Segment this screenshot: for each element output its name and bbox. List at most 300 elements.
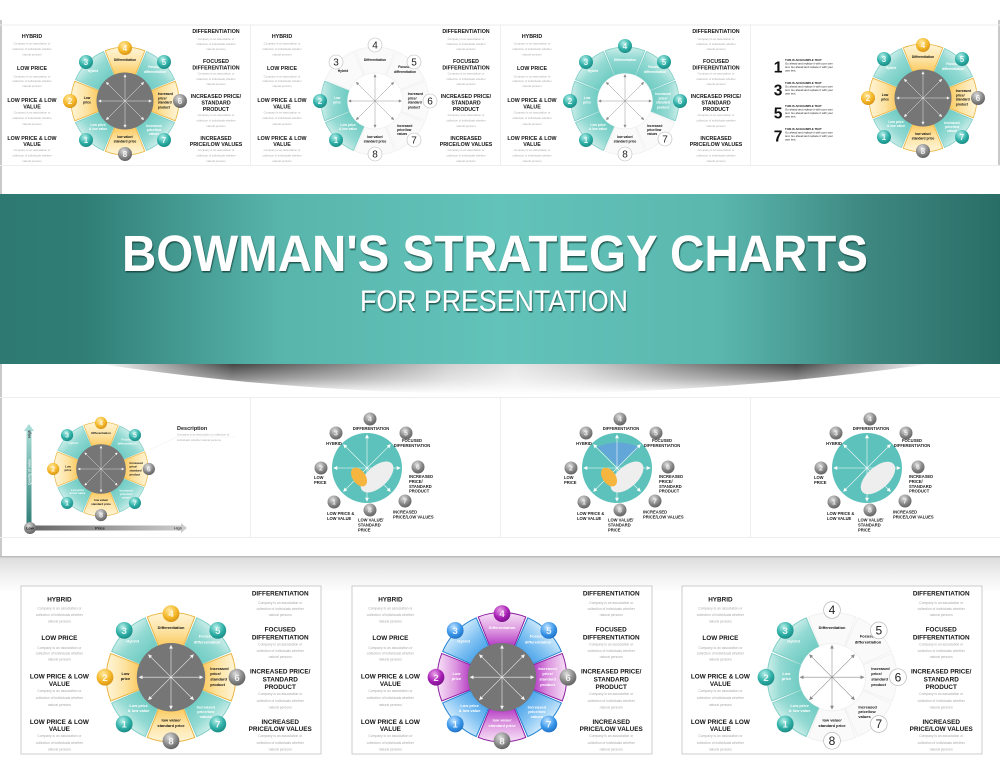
numbered list: own text.: [785, 138, 796, 142]
text column: right strategies: Company is an association or: [258, 642, 303, 646]
wheel chart: [47, 417, 155, 521]
text column: left strategies: natural persons: [272, 84, 292, 88]
text column: right strategies: DIFFERENTIATION: [442, 29, 490, 35]
segment labels: Low: [882, 93, 889, 97]
text column: right strategies: natural persons: [930, 613, 953, 617]
text column: right strategies: INCREASED: [200, 136, 232, 142]
segment labels: product: [408, 105, 421, 109]
segment labels: Low price: [790, 703, 810, 708]
segment labels: price: [83, 100, 91, 104]
strategy labels: STANDARD: [659, 484, 682, 489]
segment labels: Hybrid: [69, 441, 78, 445]
text column: left strategies: Company is an association or: [37, 734, 82, 738]
text column: left strategies: VALUE: [23, 142, 41, 148]
number balls: 2: [318, 97, 323, 106]
segment labels: Low: [782, 671, 791, 676]
text column: left strategies: natural persons: [379, 747, 402, 751]
segment labels: Low: [334, 96, 341, 100]
segment labels: & low value: [589, 127, 607, 131]
strategy labels: STANDARD: [909, 484, 932, 489]
text column: right strategies: natural persons: [600, 613, 623, 617]
number balls: 5: [133, 433, 137, 440]
number balls: 8: [829, 734, 836, 748]
text column: left strategies: collection of individuals whether: [512, 154, 552, 158]
panel: bottom slide 3 three teal segments: [682, 586, 982, 754]
numbered list: Go ahead and replace it with your own: [785, 62, 833, 66]
text column: right strategies: collection of individuals whether: [257, 741, 305, 745]
text column: right strategies: [190, 29, 243, 163]
text column: right strategies: DIFFERENTIATION: [192, 66, 240, 72]
segment labels: [782, 625, 890, 728]
teal circle chart: [832, 433, 902, 503]
number balls: 8: [168, 736, 174, 747]
numbered list: THIS IS AN EXAMPLE TEXT: [785, 104, 822, 108]
strategy labels: LOW VALUE/: [608, 518, 634, 522]
segment labels: differentiation: [942, 67, 964, 71]
text column: right strategies: Company is an association or: [919, 734, 964, 738]
strategy labels: FOCUSED: [902, 438, 922, 443]
number balls: 3: [834, 430, 838, 438]
text column: right strategies: INCREASED PRICE/: [250, 669, 311, 676]
description callout: individuals whether natural persons: [177, 438, 221, 442]
number balls: 5: [654, 430, 658, 438]
segment labels: values: [531, 714, 544, 719]
text column: right strategies: [580, 591, 643, 751]
text column: left strategies: Company is an association or: [368, 646, 413, 650]
segment labels: Hybrid: [338, 69, 348, 73]
strategy labels: PRICE/: [909, 479, 924, 484]
segment labels: price/: [129, 465, 137, 469]
segment labels: product: [956, 102, 969, 106]
segment labels: Low price: [460, 703, 480, 708]
segment labels: low value/: [493, 718, 512, 723]
segment labels: Focused: [398, 65, 412, 69]
segment labels: Increased: [647, 124, 662, 128]
wheel chart: [97, 605, 245, 749]
segment labels: standard: [539, 676, 557, 681]
text column: right strategies: collection of individuals whether: [918, 607, 966, 611]
segment labels: price/: [158, 96, 167, 100]
numbered list: text. Go ahead and replace it with your: [785, 88, 833, 92]
arrows: [348, 74, 402, 128]
number balls: 6: [427, 96, 433, 108]
number balls: 1: [783, 720, 789, 731]
segment labels: Hybrid: [126, 638, 139, 643]
segment labels: Low: [84, 96, 91, 100]
number balls: 4: [499, 609, 505, 620]
number balls: 1: [332, 500, 336, 506]
text column: left strategies: HYBRID: [47, 597, 72, 604]
text column: left strategies: LOW PRICE & LOW: [691, 719, 750, 726]
segment labels: & low value: [789, 708, 811, 713]
axis: quality of value: Quality of value: [28, 459, 32, 485]
segment labels: values: [397, 132, 407, 136]
text column: left strategies: collection of individuals whether: [12, 116, 52, 120]
text column: left strategies: Company is an association or: [698, 606, 743, 610]
text column: right strategies: collection of individuals whether: [446, 154, 486, 158]
text column: right strategies: natural persons: [930, 747, 953, 751]
segment labels: [83, 58, 173, 144]
text column: right strategies: INCREASED PRICE/: [191, 94, 242, 100]
text column: right strategies: STANDARD: [594, 676, 629, 683]
segment labels: values: [200, 714, 213, 719]
text column: left strategies: natural persons: [48, 620, 71, 624]
segment labels: price/low: [120, 492, 133, 496]
text column: left strategies: collection of individuals whether: [36, 696, 84, 700]
text column: right strategies: collection of individuals whether: [588, 607, 636, 611]
arrows: [598, 74, 652, 128]
text column: right strategies: DIFFERENTIATION: [583, 634, 640, 641]
text column: right strategies: natural persons: [930, 705, 953, 709]
text column: left strategies: Company is an association or: [368, 606, 413, 610]
text column: right strategies: natural persons: [600, 655, 623, 659]
number balls: 4: [618, 416, 622, 424]
segment labels: Increased: [197, 704, 216, 709]
text column: right strategies: natural persons: [206, 47, 226, 51]
numbered list: own text.: [785, 114, 796, 118]
wheel chart: [63, 41, 187, 161]
text column: left strategies: LOW PRICE: [702, 635, 738, 642]
strategy labels: LOW VALUE: [327, 516, 352, 521]
strategy labels: PRICE: [564, 480, 577, 485]
text column: right strategies: Company is an association or: [198, 148, 234, 152]
segment labels: price/low: [858, 709, 876, 714]
segment labels: Differentiation: [158, 625, 185, 630]
text column: right strategies: PRODUCT: [264, 684, 296, 691]
text column: left strategies: collection of individuals whether: [512, 116, 552, 120]
numbered list: THIS IS AN EXAMPLE TEXT: [785, 81, 822, 85]
text column: left strategies: LOW PRICE & LOW: [30, 719, 89, 726]
segment labels: differentiation: [855, 640, 882, 645]
text column: right strategies: Company is an association or: [698, 72, 734, 76]
text column: right strategies: Company is an association or: [448, 113, 484, 117]
segment labels: values: [122, 496, 131, 500]
text column: right strategies: Company is an association or: [258, 601, 303, 605]
segment labels: standard: [656, 101, 670, 105]
panel: middle slide 2 circle with two ellipses: [314, 412, 434, 532]
segment labels: standard price: [818, 723, 846, 728]
text column: right strategies: Company is an association or: [448, 148, 484, 152]
text column: left strategies: collection of individuals whether: [697, 696, 745, 700]
number balls: 5: [404, 430, 408, 438]
segment labels: Increased: [158, 92, 173, 96]
text column: right strategies: PRICE/LOW VALUES: [580, 726, 643, 733]
text column: left strategies: Company is an association or: [14, 148, 50, 152]
segment labels: Differentiation: [91, 431, 111, 435]
number balls: 8: [372, 150, 378, 160]
strategy labels: LOW: [314, 475, 324, 480]
segment labels: Increased: [956, 89, 971, 93]
strategy labels: [314, 426, 434, 532]
segment labels: Low price: [888, 120, 904, 124]
strategy labels: PRICE/LOW VALUES: [643, 514, 684, 520]
segment labels: [452, 625, 557, 728]
numbered list: own text.: [785, 68, 796, 72]
text column: left strategies: collection of individuals whether: [262, 154, 302, 158]
text column: right strategies: Company is an association or: [198, 37, 234, 41]
text column: right strategies: natural persons: [456, 47, 476, 51]
text column: left strategies: Company is an association or: [37, 689, 82, 693]
number balls: 5: [411, 58, 417, 68]
text column: left strategies: natural persons: [522, 122, 542, 126]
text column: right strategies: FOCUSED: [926, 627, 957, 634]
hub with arrows: [96, 72, 154, 130]
text column: right strategies: natural persons: [206, 159, 226, 163]
text column: left strategies: VALUE: [49, 726, 70, 733]
number balls: 2: [568, 97, 573, 106]
text column: right strategies: collection of individuals whether: [196, 154, 236, 158]
numbered list: 5: [774, 106, 783, 122]
text column: right strategies: collection of individuals whether: [257, 607, 305, 611]
number balls: 5: [662, 58, 667, 67]
strategy labels: PRODUCT: [909, 488, 930, 494]
segment labels: Low price: [340, 123, 356, 127]
text column: right strategies: collection of individuals whether: [196, 77, 236, 81]
text column: left strategies: natural persons: [709, 620, 732, 624]
number balls: 1: [334, 136, 339, 145]
text column: right strategies: DIFFERENTIATION: [913, 591, 970, 598]
hub with arrows: [894, 70, 952, 126]
wheel segments: [437, 612, 567, 742]
numbered list: text. Go ahead and replace it with your: [785, 65, 833, 69]
panel: top slide 4 numbered list and wheel: [774, 38, 985, 158]
strategy labels: PRICE: [358, 528, 371, 532]
segment labels: Focused: [946, 62, 960, 66]
segment labels: Low price: [590, 123, 606, 127]
text column: left strategies: collection of individuals whether: [697, 741, 745, 745]
number balls: 7: [403, 498, 407, 506]
number balls: 7: [133, 501, 137, 508]
subtitle: FOR PRESENTATION: [360, 285, 628, 318]
axis: quality of value: [24, 424, 34, 527]
segment labels: standard: [129, 468, 142, 472]
text column: right strategies: PRODUCT: [203, 107, 230, 113]
segment labels: price/low: [397, 128, 412, 132]
text column: right strategies: FOCUSED: [203, 59, 229, 65]
strategy labels: STANDARD: [358, 522, 381, 528]
text column: right strategies: [910, 591, 973, 751]
text column: right strategies: Company is an association or: [448, 72, 484, 76]
text column: right strategies: INCREASED: [592, 719, 630, 726]
text column: left strategies: HYBRID: [378, 597, 403, 604]
text column: right strategies: collection of individuals whether: [196, 42, 236, 46]
wheel chart: [563, 39, 687, 161]
number balls: 8: [921, 147, 926, 156]
strategy labels: PRICE/: [659, 479, 674, 484]
title: BOWMAN'S STRATEGY CHARTS: [122, 225, 868, 282]
axis: price: [24, 522, 187, 534]
text column: right strategies: collection of individuals whether: [446, 118, 486, 122]
text column: right strategies: Company is an association or: [258, 692, 303, 696]
number balls: 4: [368, 416, 372, 424]
text column: left strategies: LOW PRICE: [17, 66, 47, 72]
segment labels: product: [210, 682, 226, 687]
segment labels: standard price: [91, 502, 111, 506]
segment labels: standard: [408, 101, 422, 105]
text column: left strategies: collection of individuals whether: [697, 651, 745, 655]
strategy labels: STANDARD: [608, 522, 631, 528]
text column: right strategies: collection of individuals whether: [588, 649, 636, 653]
text column: right strategies: Company is an association or: [919, 642, 964, 646]
text column: left strategies: VALUE: [710, 726, 731, 733]
text column: left strategies: VALUE: [380, 681, 401, 688]
segment labels: low value/: [162, 718, 181, 723]
number balls: 3: [334, 430, 338, 438]
text column: left strategies: HYBRID: [272, 34, 292, 40]
text column: right strategies: INCREASED: [450, 136, 482, 142]
strategy labels: LOW VALUE: [577, 516, 602, 521]
number balls: [564, 412, 674, 516]
text column: right strategies: Company is an association or: [448, 37, 484, 41]
segment labels: product: [129, 472, 140, 476]
text column: left strategies: natural persons: [22, 122, 42, 126]
strategy labels: FOCUSED: [652, 438, 672, 443]
axis: price: Low: [26, 526, 34, 530]
text column: right strategies: Company is an association or: [919, 692, 964, 696]
text column: left strategies: collection of individuals whether: [512, 47, 552, 51]
text column: left strategies: Company is an association or: [14, 74, 50, 78]
number balls: 6: [178, 97, 183, 106]
number balls: 5: [904, 430, 908, 438]
numbered list: own text.: [785, 92, 796, 96]
strategy labels: LOW: [564, 475, 574, 480]
text column: left strategies: LOW PRICE: [267, 66, 297, 72]
number balls: 3: [453, 626, 458, 637]
segment labels: Hybrid: [886, 66, 896, 70]
text column: left strategies: collection of individuals whether: [262, 47, 302, 51]
number balls: 7: [162, 136, 167, 145]
text column: right strategies: natural persons: [456, 159, 476, 163]
numbered list: [774, 58, 833, 146]
strategy labels: DIFFERENTIATION: [644, 443, 680, 448]
number balls: [861, 38, 985, 158]
text column: left strategies: HYBRID: [522, 34, 542, 40]
segment labels: [65, 431, 143, 506]
text column: right strategies: DIFFERENTIATION: [442, 66, 490, 72]
segment labels: Hybrid: [787, 638, 800, 643]
segment labels: differentiation: [394, 70, 416, 74]
text column: left strategies: VALUE: [49, 681, 70, 688]
text column: right strategies: DIFFERENTIATION: [692, 29, 740, 35]
text column: left strategies: LOW PRICE & LOW: [691, 673, 750, 680]
text column: left strategies: collection of individuals whether: [262, 116, 302, 120]
text column: left strategies: Company is an association or: [698, 646, 743, 650]
text column: right strategies: Company is an association or: [589, 642, 634, 646]
text column: right strategies: FOCUSED: [453, 59, 479, 65]
segment labels: price: [583, 100, 591, 104]
text column: right strategies: PRODUCT: [595, 684, 627, 691]
text column: left strategies: LOW PRICE & LOW: [361, 719, 420, 726]
text column: left strategies: VALUE: [23, 104, 41, 110]
number balls: 1: [584, 136, 589, 145]
segment labels: values: [647, 132, 657, 136]
segment labels: Increased: [210, 666, 229, 671]
text column: right strategies: natural persons: [269, 655, 292, 659]
number balls: [47, 417, 155, 521]
hub with arrows: [76, 444, 126, 494]
number balls: 1: [65, 501, 69, 508]
text column: right strategies: Company is an association or: [198, 72, 234, 76]
number balls: 6: [416, 464, 420, 472]
number balls: 4: [372, 40, 378, 52]
segment labels: Low price: [71, 488, 85, 492]
text column: left strategies: Company is an association or: [264, 110, 300, 114]
segment labels: & low value: [459, 708, 481, 713]
number balls: 1: [453, 720, 459, 731]
segment labels: differentiation: [194, 640, 221, 645]
wheel segments: [54, 422, 148, 516]
segment labels: standard price: [912, 136, 935, 140]
number balls: 2: [433, 673, 439, 684]
number balls: 7: [960, 133, 965, 142]
number balls: 6: [666, 464, 670, 472]
text column: right strategies: INCREASED: [261, 719, 299, 726]
wheel segments: [869, 44, 977, 152]
text column: left strategies: LOW PRICE: [41, 635, 77, 642]
numbered list: 3: [774, 82, 783, 100]
text column: right strategies: INCREASED: [700, 136, 732, 142]
segment labels: Focused: [860, 634, 877, 639]
segment labels: product: [871, 682, 887, 687]
text column: right strategies: natural persons: [706, 47, 726, 51]
text column: right strategies: collection of individuals whether: [588, 741, 636, 745]
text column: right strategies: [440, 29, 493, 163]
segment labels: values: [858, 714, 872, 719]
text column: left strategies: Company is an association or: [264, 42, 300, 46]
number balls: 3: [122, 626, 127, 637]
text column: left strategies: natural persons: [522, 52, 542, 56]
text column: right strategies: PRICE/LOW VALUES: [190, 142, 243, 148]
strategy labels: PRICE/: [409, 479, 424, 484]
panel: middle slide 4 circle with one ellipse: [814, 412, 934, 532]
axis: quality of value: High: [28, 430, 32, 438]
text column: right strategies: natural persons: [600, 747, 623, 751]
text column: right strategies: collection of individuals whether: [446, 77, 486, 81]
text column: right strategies: collection of individuals whether: [696, 118, 736, 122]
text column: left strategies: VALUE: [523, 142, 541, 148]
segment labels: & low value: [128, 708, 150, 713]
text column: left strategies: natural persons: [48, 747, 71, 751]
segment labels: [881, 55, 971, 140]
frame: [21, 586, 321, 754]
text column: left strategies: [30, 597, 89, 751]
segment labels: Differentiation: [114, 58, 136, 62]
strategy labels: INCREASED: [409, 474, 433, 479]
number balls: 5: [215, 626, 221, 637]
number balls: [97, 605, 245, 749]
text column: left strategies: natural persons: [522, 159, 542, 163]
numbered list: Go ahead and replace it with your own: [785, 108, 833, 112]
number balls: 8: [123, 150, 128, 159]
number balls: 6: [147, 467, 151, 474]
wheel segments: [321, 47, 429, 155]
number balls: 7: [215, 720, 220, 731]
text column: right strategies: collection of individuals whether: [257, 699, 305, 703]
wheel chart: [428, 605, 576, 749]
text column: left strategies: Company is an association or: [368, 689, 413, 693]
strategy labels: INCREASED: [659, 474, 683, 479]
number balls: [814, 412, 924, 516]
text column: right strategies: PRICE/LOW VALUES: [440, 142, 493, 148]
segment labels: low value/: [617, 135, 633, 139]
text column: left strategies: LOW PRICE & LOW: [30, 673, 89, 680]
arrows: [800, 645, 864, 709]
text column: left strategies: Company is an association or: [514, 42, 550, 46]
segment labels: product: [657, 105, 670, 109]
segment labels: differentiation: [118, 442, 137, 446]
strategy labels: INCREASED: [909, 474, 933, 479]
text column: left strategies: natural persons: [48, 703, 71, 707]
